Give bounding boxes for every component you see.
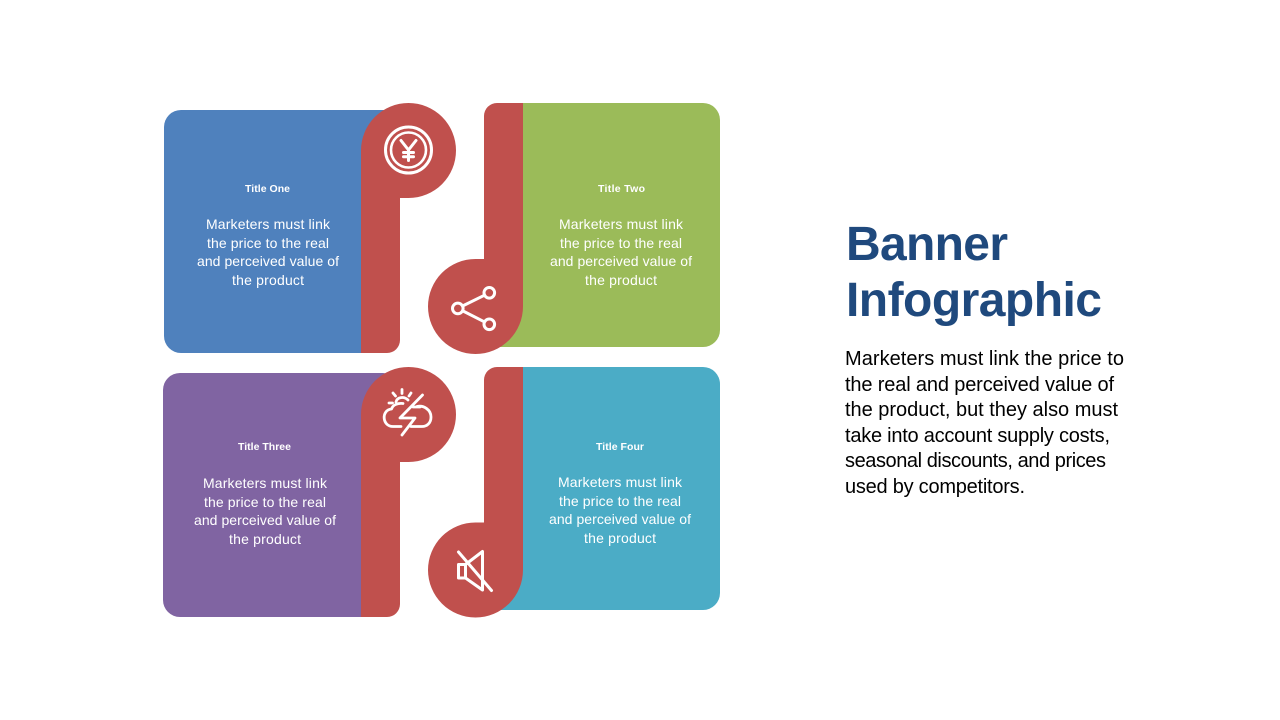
text block: title four description: the product [584,530,656,546]
heading: title three: Title Three [238,441,291,453]
text block: title four description [549,474,691,546]
icon: cloud with sun and lightning [384,390,431,435]
banner shape: red top-left [361,103,456,353]
icon: yen coin [386,127,432,173]
text block: title two description: the price to the real [560,235,682,251]
text block: title three description [194,475,336,547]
panel: title four card [484,367,720,610]
text block: body paragraph: seasonal discounts, and prices [845,450,1106,472]
text block: title three description: the product [229,531,301,547]
heading: banner infographic: Banner [846,218,1008,271]
text block: body paragraph: Marketers must link the price to [845,348,1124,370]
text block: title one description: and perceived value of [197,253,339,269]
banner shape: red bottom-left [361,367,456,617]
icon: muted speaker [458,552,492,590]
heading: banner infographic [846,218,1102,327]
text block: body paragraph: used by competitors. [845,476,1025,498]
text block: title two description: the product [585,272,657,288]
text block: title four description: Marketers must link [558,474,683,490]
banner shape: red top-right [428,103,523,354]
text block: title one description: the price to the real [207,235,329,251]
text block: title three description: Marketers must link [203,475,328,491]
text block: title two description [550,216,692,288]
text block: title one description: Marketers must link [206,216,331,232]
icon: share [452,288,495,330]
heading: banner infographic: Infographic [846,274,1102,327]
text block: title three description: and perceived value of [194,512,336,528]
text block: title one description [197,216,339,288]
text block: title one description: the product [232,272,304,288]
text block: body paragraph: the product, but they also must [845,399,1118,421]
text block: title four description: and perceived value of [549,511,691,527]
banner shape: red bottom-right [428,367,523,618]
text block: title three description: the price to the real [204,494,326,510]
heading: title four: Title Four [596,441,644,453]
text block: title four description: the price to the real [559,493,681,509]
panel: title two card [484,103,720,347]
text block: title two description: Marketers must link [559,216,684,232]
text block: body paragraph: the real and perceived value of [845,374,1114,396]
text block: title two description: and perceived value of [550,253,692,269]
heading: title one: Title One [245,183,290,195]
heading: title two: Title Two [598,183,645,195]
panel: title three card [163,373,400,617]
text block: body paragraph [845,348,1124,498]
panel: title one card [164,110,400,353]
text block: body paragraph: take into account supply costs, [845,425,1110,447]
